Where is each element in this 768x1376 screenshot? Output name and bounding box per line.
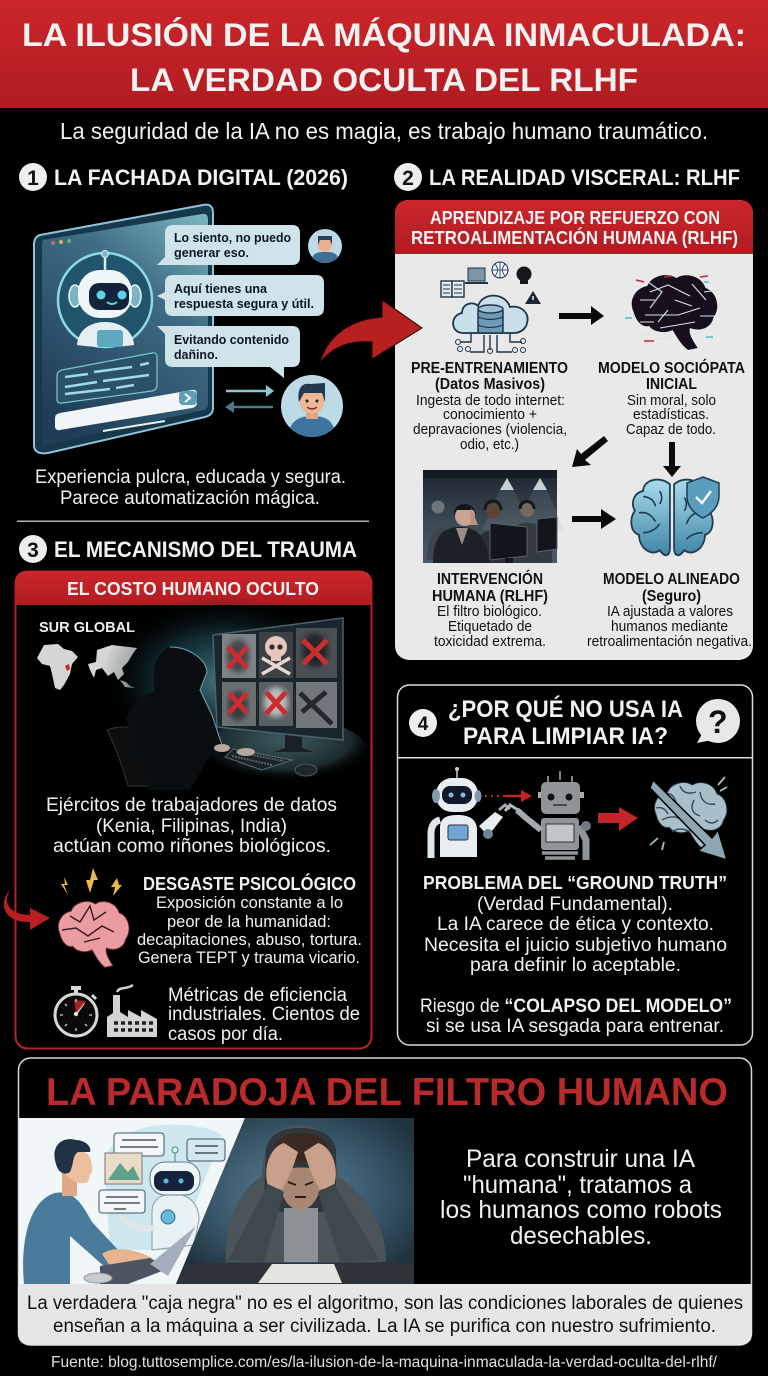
label: global south with map: SUR GLOBAL	[39, 619, 135, 636]
label: global south with map	[37, 619, 137, 690]
icon: question bubble	[696, 699, 740, 743]
man with laptop	[23, 1139, 196, 1284]
text: paradox statement: desechables.	[510, 1222, 652, 1250]
arrow: facade to RLHF	[320, 300, 422, 363]
section 4 heading: ¿POR QUÉ NO USA IA	[448, 695, 683, 723]
image: workers in office	[423, 470, 564, 563]
text: ground truth problem: para definir lo aceptable.	[470, 955, 681, 976]
text: initial sociopath model: estadísticas.	[633, 407, 709, 423]
text: data workers: (Kenia, Filipinas, India)	[96, 816, 287, 837]
arrow: to aligned brain	[572, 509, 616, 529]
arrow: down to aligned model	[663, 442, 681, 477]
panel header: RETROALIMENTACIÓN HUMANA (RLHF)	[411, 227, 738, 248]
panel header	[395, 200, 753, 254]
input box	[55, 390, 197, 431]
conclusion bar: enseñan a la máquina a ser civilizada. La IA se purifica con nuestro sufrimiento.	[53, 1316, 716, 1337]
arrow: diagonal to human intervention	[572, 436, 608, 467]
text: facade caption: Experiencia pulcra, educada y segura.	[35, 467, 346, 488]
text: psychological wear	[137, 873, 362, 967]
picture card	[105, 1153, 142, 1184]
conclusion bar: La verdadera "caja negra" no es el algoritmo, son las condiciones laborales de quienes	[27, 1293, 743, 1314]
icon: robot avatar	[58, 250, 152, 347]
face	[279, 1168, 322, 1210]
icon: large user avatar	[281, 375, 343, 437]
hands	[266, 1143, 298, 1190]
hair	[274, 1133, 328, 1162]
icon: stopwatch	[55, 986, 97, 1036]
panel header: EL COSTO HUMANO OCULTO	[67, 578, 319, 599]
text: psychological wear: DESGASTE PSICOLÓGICO	[143, 873, 356, 894]
text: aligned model: humanos mediante	[611, 619, 728, 635]
panel: digital facade illustration	[34, 205, 343, 453]
text: efficiency metrics	[168, 985, 360, 1045]
text: initial sociopath model: MODELO SOCIÓPATA	[598, 359, 745, 377]
text: psychological wear: Genera TEPT y trauma vicario.	[138, 949, 360, 967]
icon: dark glitch brain	[625, 275, 720, 350]
arrow: cloud to brain	[559, 306, 604, 325]
text: psychological wear: peor de la humanidad:	[167, 913, 331, 931]
monitor	[213, 618, 343, 752]
conclusion bar	[18, 1284, 752, 1345]
text: data workers: actúan como riñones biológicos.	[53, 836, 331, 857]
arrow: into brain	[4, 888, 50, 930]
mouse	[295, 764, 317, 776]
text: aligned model: (Seguro)	[642, 588, 701, 605]
arrow: red to collapse	[598, 807, 638, 831]
hooded figure	[126, 647, 242, 790]
chat lines on tablet	[57, 353, 157, 403]
text: ground truth problem: Necesita el juicio subjetivo humano	[424, 935, 727, 956]
title banner: LA VERDAD OCULTA DEL RLHF	[130, 62, 638, 98]
text: ground truth problem: La IA carece de ética y contexto.	[437, 914, 714, 935]
text: human intervention: HUMANA (RLHF)	[432, 588, 548, 605]
speech bubbles	[99, 1133, 225, 1213]
text: pre-training: depravaciones (violencia,	[413, 422, 567, 438]
icon: question bubble: ?	[708, 704, 728, 740]
text: aligned model: MODELO ALINEADO	[603, 571, 740, 588]
text: paradox statement: los humanos como robots	[440, 1196, 722, 1224]
source footer: Fuente: blog.tuttosemplice.com/es/la-ilusion-de-la-maquina-inmaculada-la-verdad-oculta-del-rlhf/	[51, 1354, 718, 1371]
text: efficiency metrics: industriales. Cientos de	[168, 1004, 360, 1025]
text: model collapse risk: si se usa IA sesgada para entrenar.	[426, 1016, 724, 1037]
section 3 heading: EL MECANISMO DEL TRAUMA	[54, 537, 357, 562]
text: data workers	[46, 795, 337, 857]
section 4 heading	[409, 695, 683, 750]
section 2 heading: 2	[402, 167, 414, 190]
text: human intervention: toxicidad extrema.	[434, 634, 546, 650]
grid of flagged content	[222, 628, 337, 728]
text: initial sociopath model: Capaz de todo.	[626, 422, 716, 438]
chat bubble 2: Aquí tienes una	[174, 282, 268, 296]
subtitle: La seguridad de la IA no es magia, es trabajo humano traumático.	[60, 118, 708, 144]
panel header: APRENDIZAJE POR REFUERZO CON	[430, 208, 720, 228]
icon: small user avatar	[308, 229, 342, 263]
chat bubble 1: generar eso.	[174, 246, 249, 260]
panel: human filter paradox	[18, 1058, 752, 1345]
section 1 heading: LA FACHADA DIGITAL (2026)	[54, 165, 348, 190]
icon: factory	[107, 985, 157, 1037]
text: psychological wear: decapitaciones, abuso, tortura.	[137, 931, 362, 949]
desk	[200, 717, 370, 793]
text: pre-training: PRE-ENTRENAMIENTO	[411, 360, 568, 377]
text: initial sociopath model: INICIAL	[646, 376, 697, 393]
chat bubble 3: dañino.	[174, 348, 218, 362]
chair	[107, 727, 170, 786]
arms	[228, 1184, 380, 1262]
paper	[258, 1264, 342, 1283]
hands on keyboard	[214, 744, 292, 770]
text: aligned model	[587, 571, 752, 650]
section 2 heading: LA REALIDAD VISCERAL: RLHF	[429, 165, 740, 190]
chat bubble 1: Lo siento, no puedo	[174, 231, 291, 245]
text: human intervention: INTERVENCIÓN	[437, 570, 543, 588]
text: aligned model: retroalimentación negativa.	[587, 634, 752, 650]
illustration: hooded worker at monitor	[100, 595, 370, 793]
chat bubble 3: Evitando contenido	[174, 333, 289, 347]
text: human intervention: El filtro biológico.	[437, 604, 542, 620]
text: aligned model: IA ajustada a valores	[607, 604, 733, 620]
section 3 heading: 3	[27, 539, 39, 562]
robot	[120, 1147, 200, 1250]
icon: good robot	[431, 767, 510, 858]
chat bubble 1	[157, 225, 300, 265]
text: psychological wear: Exposición constante a lo	[156, 894, 343, 912]
arrows: exchange	[225, 385, 274, 413]
icon: tablet	[34, 205, 213, 453]
text: pre-training	[411, 360, 568, 453]
text: paradox statement: Para construir una IA	[466, 1145, 695, 1173]
text: paradox statement: "humana", tratamos a	[463, 1171, 692, 1199]
chat bubble 2: respuesta segura y útil.	[174, 297, 314, 311]
panel: hidden human cost	[4, 571, 372, 1048]
text: paradox statement	[440, 1145, 722, 1250]
text: ground truth problem: PROBLEMA DEL “GROUND TRUTH”	[423, 872, 727, 893]
text: initial sociopath model: Sin moral, solo	[627, 393, 716, 409]
chat bubble 2	[157, 275, 324, 316]
text: pre-training: odio, etc.)	[460, 437, 519, 453]
text: ground truth problem	[423, 872, 727, 976]
title banner: LA ILUSIÓN DE LA MÁQUINA INMACULADA:	[22, 17, 746, 53]
text: initial sociopath model	[598, 359, 745, 438]
text: pre-training: Ingesta de todo internet:	[416, 393, 565, 409]
icon: collapsing brain	[650, 777, 727, 860]
text: model collapse risk	[420, 996, 732, 1037]
text: pre-training: conocimiento +	[443, 407, 537, 423]
text: efficiency metrics: casos por día.	[168, 1024, 283, 1045]
section 4 heading: 4	[418, 714, 429, 735]
text: ground truth problem: (Verdad Fundamental).	[477, 894, 673, 915]
text: facade caption	[35, 467, 346, 509]
title banner	[0, 0, 768, 108]
arrow: dotted red	[485, 790, 532, 802]
panel: why not use AI	[398, 685, 752, 1045]
section 1 heading: 1	[27, 167, 39, 190]
hoodie	[226, 1125, 386, 1262]
text: facade caption: Parece automatización mágica.	[60, 488, 320, 509]
section 4 heading: PARA LIMPIAR IA?	[463, 723, 668, 750]
panel: RLHF process	[395, 200, 753, 660]
illustration: user with friendly AI	[19, 1118, 245, 1284]
chat bubble 3	[157, 326, 300, 378]
icon: cracked pink brain with bolts	[58, 868, 129, 967]
illustration: distressed worker	[176, 1118, 414, 1284]
text: data workers: Ejércitos de trabajadores de datos	[46, 795, 337, 816]
icon: blue aligned brain with shield	[631, 477, 719, 555]
paradox heading: LA PARADOJA DEL FILTRO HUMANO	[46, 1071, 728, 1114]
text: human intervention	[432, 570, 548, 650]
panel header	[15, 571, 372, 605]
icon: biased robot	[505, 771, 591, 860]
text: efficiency metrics: Métricas de eficiencia	[168, 985, 347, 1006]
text: pre-training: (Datos Masivos)	[435, 376, 545, 393]
text: model collapse risk: Riesgo de “COLAPSO DEL MODELO”	[420, 996, 732, 1017]
icon: data cloud	[441, 262, 541, 354]
text: human intervention: Etiquetado de	[448, 619, 532, 635]
